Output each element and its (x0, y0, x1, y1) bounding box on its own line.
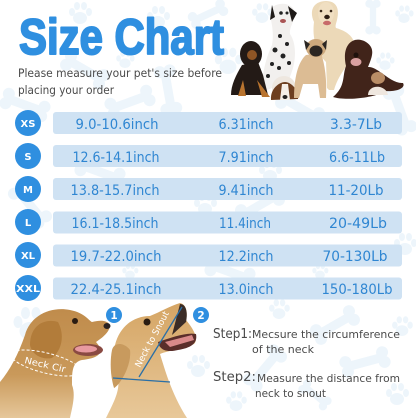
black and tan spaniel (231, 41, 270, 97)
row XXL (15, 275, 402, 301)
pug (294, 39, 327, 98)
step 1 text: of the neck (252, 344, 315, 356)
photo: dog 2 neck to snout (106, 303, 196, 418)
row S: S (24, 152, 32, 163)
row M: M (23, 185, 33, 196)
photo: group of dogs (231, 1, 404, 100)
row M (15, 176, 402, 202)
size table (15, 110, 402, 301)
row M: 11-20Lb (328, 183, 384, 199)
subtitle: placing your order (18, 83, 114, 97)
step 2 text: neck to snout (255, 388, 326, 400)
dalmatian (262, 4, 297, 92)
row XL: 19.7-22.0inch (70, 249, 162, 265)
row XS: 6.31inch (218, 117, 274, 133)
step 1 text: Step1: (213, 327, 252, 342)
row L: 16.1-18.5inch (72, 216, 158, 232)
neck to snout line: Neck to Snout (134, 310, 172, 369)
row M: 13.8-15.7inch (70, 183, 160, 199)
row XS: 9.0-10.6inch (76, 117, 158, 133)
row XXL: 22.4-25.1inch (70, 282, 162, 298)
row S: 6.6-11Lb (329, 150, 385, 166)
small puppy (368, 72, 388, 95)
row XXL: 150-180Lb (322, 282, 393, 298)
row XS: XS (21, 119, 35, 130)
badge 2 (193, 307, 209, 323)
row XL: 70-130Lb (322, 249, 388, 265)
row L: 20-49Lb (329, 216, 387, 232)
badge 1 (106, 307, 122, 323)
badge 1: 1 (110, 310, 118, 322)
badge 2: 2 (197, 310, 205, 322)
step 2 text: Measure the distance from (257, 373, 400, 385)
row XL: XL (21, 251, 36, 262)
row XS (15, 110, 402, 136)
golden retriever standing (312, 1, 355, 90)
row XXL: XXL (16, 284, 41, 295)
subtitle (18, 66, 222, 97)
step 2 text: Step2: (213, 370, 256, 385)
neck measure label: Neck Cir (23, 356, 67, 375)
step 2 text (213, 370, 400, 400)
chocolate labrador (333, 40, 404, 99)
row M: 9.41inch (218, 183, 274, 199)
row L: L (25, 218, 32, 229)
photo: dog 1 neck circumference (0, 309, 110, 418)
step 1 text (213, 327, 400, 356)
row XXL: 13.0inch (218, 282, 274, 298)
row L: 11.4inch (219, 216, 271, 232)
row S: 7.91inch (218, 150, 274, 166)
row L (15, 209, 402, 235)
row XL: 12.2inch (218, 249, 274, 265)
brown puppy (271, 76, 298, 100)
row S (15, 143, 402, 169)
step 1 text: Mecsure the circumference (252, 329, 400, 341)
row S: 12.6-14.1inch (72, 150, 160, 166)
row XL (15, 242, 402, 268)
row XS: 3.3-7Lb (330, 117, 382, 133)
title: Size Chart (19, 9, 224, 65)
subtitle: Please measure your pet's size before (18, 66, 222, 80)
